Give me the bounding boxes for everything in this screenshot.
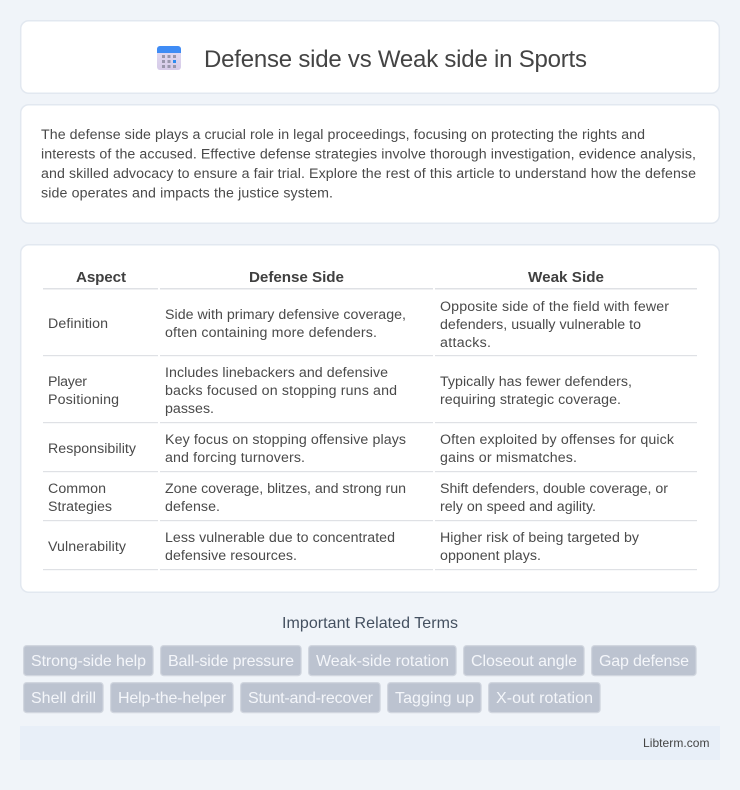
intro paragraph bbox=[41, 127, 696, 202]
tag: Weak-side rotation: Weak-side rotation bbox=[316, 653, 449, 670]
row: common strategies: Strategies bbox=[48, 499, 112, 515]
row: player positioning: requiring strategic coverage. bbox=[440, 392, 621, 408]
table header bbox=[43, 269, 697, 290]
row: responsibility: Key focus on stopping offensive plays bbox=[165, 432, 406, 448]
row: responsibility: Responsibility bbox=[48, 441, 137, 457]
tag: Gap defense bbox=[592, 646, 696, 676]
row: vulnerability bbox=[43, 530, 697, 570]
intro paragraph: The defense side plays a crucial role in legal proceedings, focusing on protecting the rights and bbox=[41, 127, 645, 143]
footer bbox=[20, 726, 720, 760]
tag: Help-the-helper: Help-the-helper bbox=[118, 690, 227, 707]
row: definition: Side with primary defensive coverage, bbox=[165, 307, 406, 323]
tag: X-out rotation bbox=[489, 683, 600, 713]
row: player positioning: Player bbox=[48, 374, 87, 390]
tag: Weak-side rotation bbox=[309, 646, 456, 676]
table header: Weak Side bbox=[528, 269, 604, 286]
tag: Closeout angle: Closeout angle bbox=[471, 653, 577, 670]
row: common strategies: Common bbox=[48, 481, 106, 497]
row: responsibility: gains or mismatches. bbox=[440, 450, 577, 466]
row: common strategies bbox=[43, 481, 697, 521]
tag: Gap defense: Gap defense bbox=[599, 653, 689, 670]
table header: Aspect bbox=[76, 269, 126, 286]
tag: Stunt-and-recover bbox=[241, 683, 380, 713]
row: common strategies: Zone coverage, blitzes, and strong run bbox=[165, 481, 406, 497]
row: vulnerability: Less vulnerable due to concentrated bbox=[165, 530, 395, 546]
row: player positioning: Typically has fewer defenders, bbox=[440, 374, 632, 390]
tag: Shell drill: Shell drill bbox=[31, 690, 96, 707]
panel: comparison table bbox=[21, 245, 719, 592]
row: responsibility bbox=[43, 432, 697, 472]
row: responsibility: and forcing turnovers. bbox=[165, 450, 305, 466]
tag: Strong-side help: Strong-side help bbox=[31, 653, 146, 670]
tag: Tagging up: Tagging up bbox=[395, 690, 474, 707]
row: player positioning: passes. bbox=[165, 401, 214, 417]
tag: Closeout angle bbox=[464, 646, 584, 676]
row: common strategies: rely on speed and agility. bbox=[440, 499, 596, 515]
intro paragraph: side operates and impacts the justice system. bbox=[41, 186, 333, 202]
row: vulnerability: Vulnerability bbox=[48, 539, 127, 555]
intro paragraph: and skilled advocacy to ensure a fair trial. Explore the rest of this article to understand how the defense bbox=[41, 166, 696, 182]
row: player positioning: Includes linebackers and defensive bbox=[165, 365, 388, 381]
tag: Strong-side help bbox=[24, 646, 153, 676]
row: player positioning: backs focused on stopping runs and bbox=[165, 383, 397, 399]
tag: Ball-side pressure: Ball-side pressure bbox=[168, 653, 294, 670]
row: common strategies: Shift defenders, double coverage, or bbox=[440, 481, 668, 497]
icon: calendar bbox=[157, 46, 181, 70]
tag: Ball-side pressure bbox=[161, 646, 301, 676]
tag: Help-the-helper bbox=[111, 683, 233, 713]
tag: X-out rotation: X-out rotation bbox=[496, 690, 593, 707]
row: vulnerability: defensive resources. bbox=[165, 548, 297, 564]
row: vulnerability: opponent plays. bbox=[440, 548, 541, 564]
row: common strategies: defense. bbox=[165, 499, 220, 515]
row: definition: often containing more defenders. bbox=[165, 325, 377, 341]
heading: related terms: Important Related Terms bbox=[282, 615, 458, 632]
footer: Libterm.com bbox=[643, 736, 710, 750]
panel: title card bbox=[21, 21, 719, 93]
tag: Shell drill bbox=[24, 683, 103, 713]
tag: Tagging up bbox=[388, 683, 481, 713]
row: definition bbox=[43, 299, 697, 356]
row: player positioning bbox=[43, 365, 697, 423]
panel: related term tags bbox=[24, 646, 696, 713]
title: Defense side vs Weak side in Sports bbox=[204, 46, 587, 73]
row: definition: Opposite side of the field with fewer bbox=[440, 299, 669, 315]
row: definition: attacks. bbox=[440, 335, 491, 351]
row: responsibility: Often exploited by offenses for quick bbox=[440, 432, 675, 448]
row: vulnerability: Higher risk of being targeted by bbox=[440, 530, 640, 546]
table header: Defense Side bbox=[249, 269, 344, 286]
tag: Stunt-and-recover: Stunt-and-recover bbox=[248, 690, 374, 707]
row: player positioning: Positioning bbox=[48, 392, 119, 408]
intro paragraph: interests of the accused. Effective defense strategies involve thorough investigation, evidence analysis, bbox=[41, 146, 696, 162]
panel: intro text bbox=[21, 105, 719, 223]
row: definition: Definition bbox=[48, 316, 108, 332]
row: definition: defenders, usually vulnerable to bbox=[440, 317, 641, 333]
